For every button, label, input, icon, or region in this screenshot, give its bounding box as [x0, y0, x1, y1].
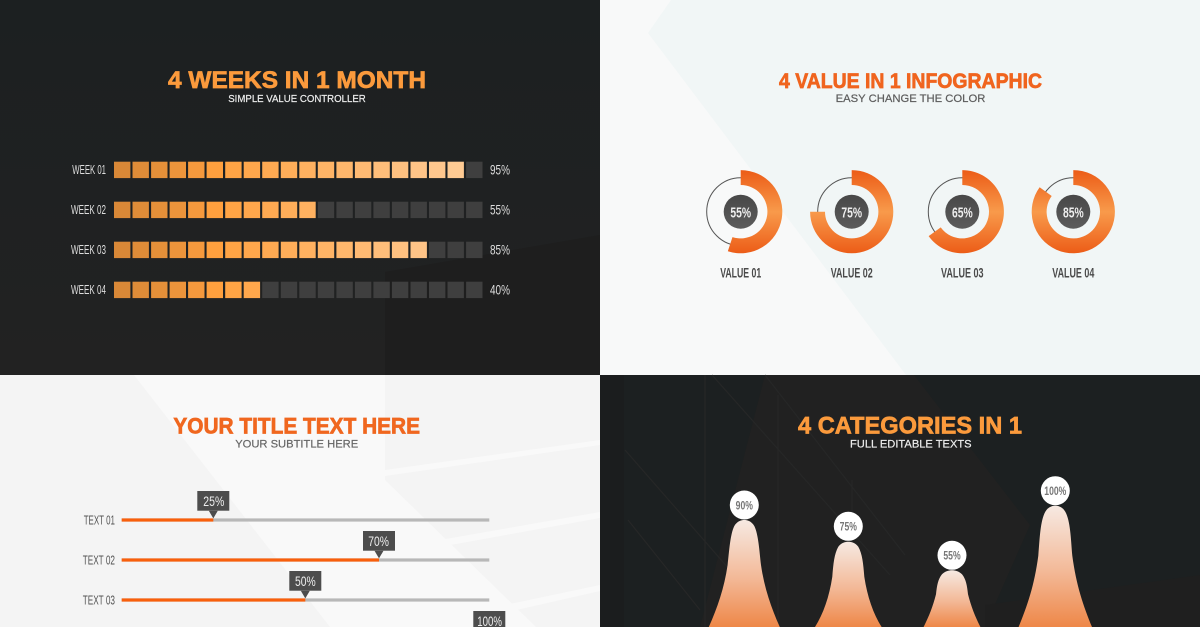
peak: 90%: 90% — [736, 498, 753, 512]
row: week 02: 55% — [490, 202, 510, 218]
donut: value 03 65% — [928, 170, 1004, 280]
donut: value 04 85% — [1032, 170, 1115, 280]
row: week 01 — [72, 162, 510, 178]
row: week 02 — [71, 202, 510, 218]
title: 4 CATEGORIES IN 1 — [798, 412, 1022, 440]
title: YOUR TITLE TEXT HERE — [173, 414, 420, 438]
subtitle: YOUR SUBTITLE HERE — [235, 438, 359, 450]
row: week 03: 85% — [490, 242, 510, 258]
donut: value 01 55%: 55% — [730, 205, 751, 221]
peak: 100% — [1019, 476, 1092, 627]
donut: value 03 65%: VALUE 03 — [941, 264, 984, 280]
row: week 01: WEEK 01 — [72, 163, 106, 177]
panel: your title text here — [0, 375, 600, 627]
slider: text 02 70% — [83, 531, 489, 568]
donut: value 02 75%: VALUE 02 — [831, 264, 873, 280]
donut: value 01 55% — [707, 170, 782, 280]
slider: text 03 50%: 50% — [295, 573, 316, 589]
panel: 4 categories in 1 — [600, 375, 1200, 627]
peak: 75%: 75% — [840, 520, 857, 534]
peak: 55%: 55% — [943, 549, 961, 563]
row: week 04 — [71, 282, 510, 298]
slider: text 02 70%: 70% — [368, 533, 389, 549]
donut: value 02 75% — [810, 170, 893, 280]
panel: 4 weeks in 1 month — [0, 0, 600, 375]
panel 3 background — [0, 375, 600, 627]
row: week 02: WEEK 02 — [71, 203, 106, 217]
slider: text 02 70%: TEXT 02 — [83, 554, 115, 568]
panel 2 background — [600, 0, 1200, 375]
slider: text 01 25% — [84, 491, 489, 528]
donut: value 04 85%: 85% — [1063, 205, 1084, 221]
slider: text 01 25%: 25% — [203, 493, 224, 509]
peak: 75% — [815, 512, 882, 627]
slider: text 03 50% — [83, 571, 489, 608]
peak: 90% — [709, 490, 780, 627]
donut: value 01 55%: VALUE 01 — [720, 264, 761, 280]
panel 1 background — [0, 0, 600, 375]
slider: text 01 25%: TEXT 01 — [84, 514, 115, 528]
subtitle: FULL EDITABLE TEXTS — [850, 438, 972, 450]
panel 4 background — [600, 375, 1200, 627]
donut: value 02 75%: 75% — [841, 205, 862, 221]
subtitle: EASY CHANGE THE COLOR — [836, 93, 985, 105]
row: week 04: WEEK 04 — [71, 283, 106, 297]
title: 4 VALUE IN 1 INFOGRAPHIC — [779, 70, 1042, 93]
donut: value 03 65%: 65% — [952, 205, 973, 221]
row: week 03: WEEK 03 — [71, 243, 106, 257]
peak: 55% — [924, 541, 980, 627]
subtitle: SIMPLE VALUE CONTROLLER — [228, 93, 366, 105]
row: week 04: 40% — [490, 282, 510, 298]
row: week 01: 95% — [490, 162, 510, 178]
donut: value 04 85%: VALUE 04 — [1052, 264, 1094, 280]
title: 4 WEEKS IN 1 MONTH — [168, 67, 426, 94]
tooltip: 100% — [473, 611, 505, 627]
slider: text 03 50%: TEXT 03 — [83, 594, 115, 608]
peak: 100%: 100% — [1044, 484, 1067, 498]
panel: 4 value in 1 infographic — [600, 0, 1200, 375]
row: week 03 — [71, 242, 510, 258]
